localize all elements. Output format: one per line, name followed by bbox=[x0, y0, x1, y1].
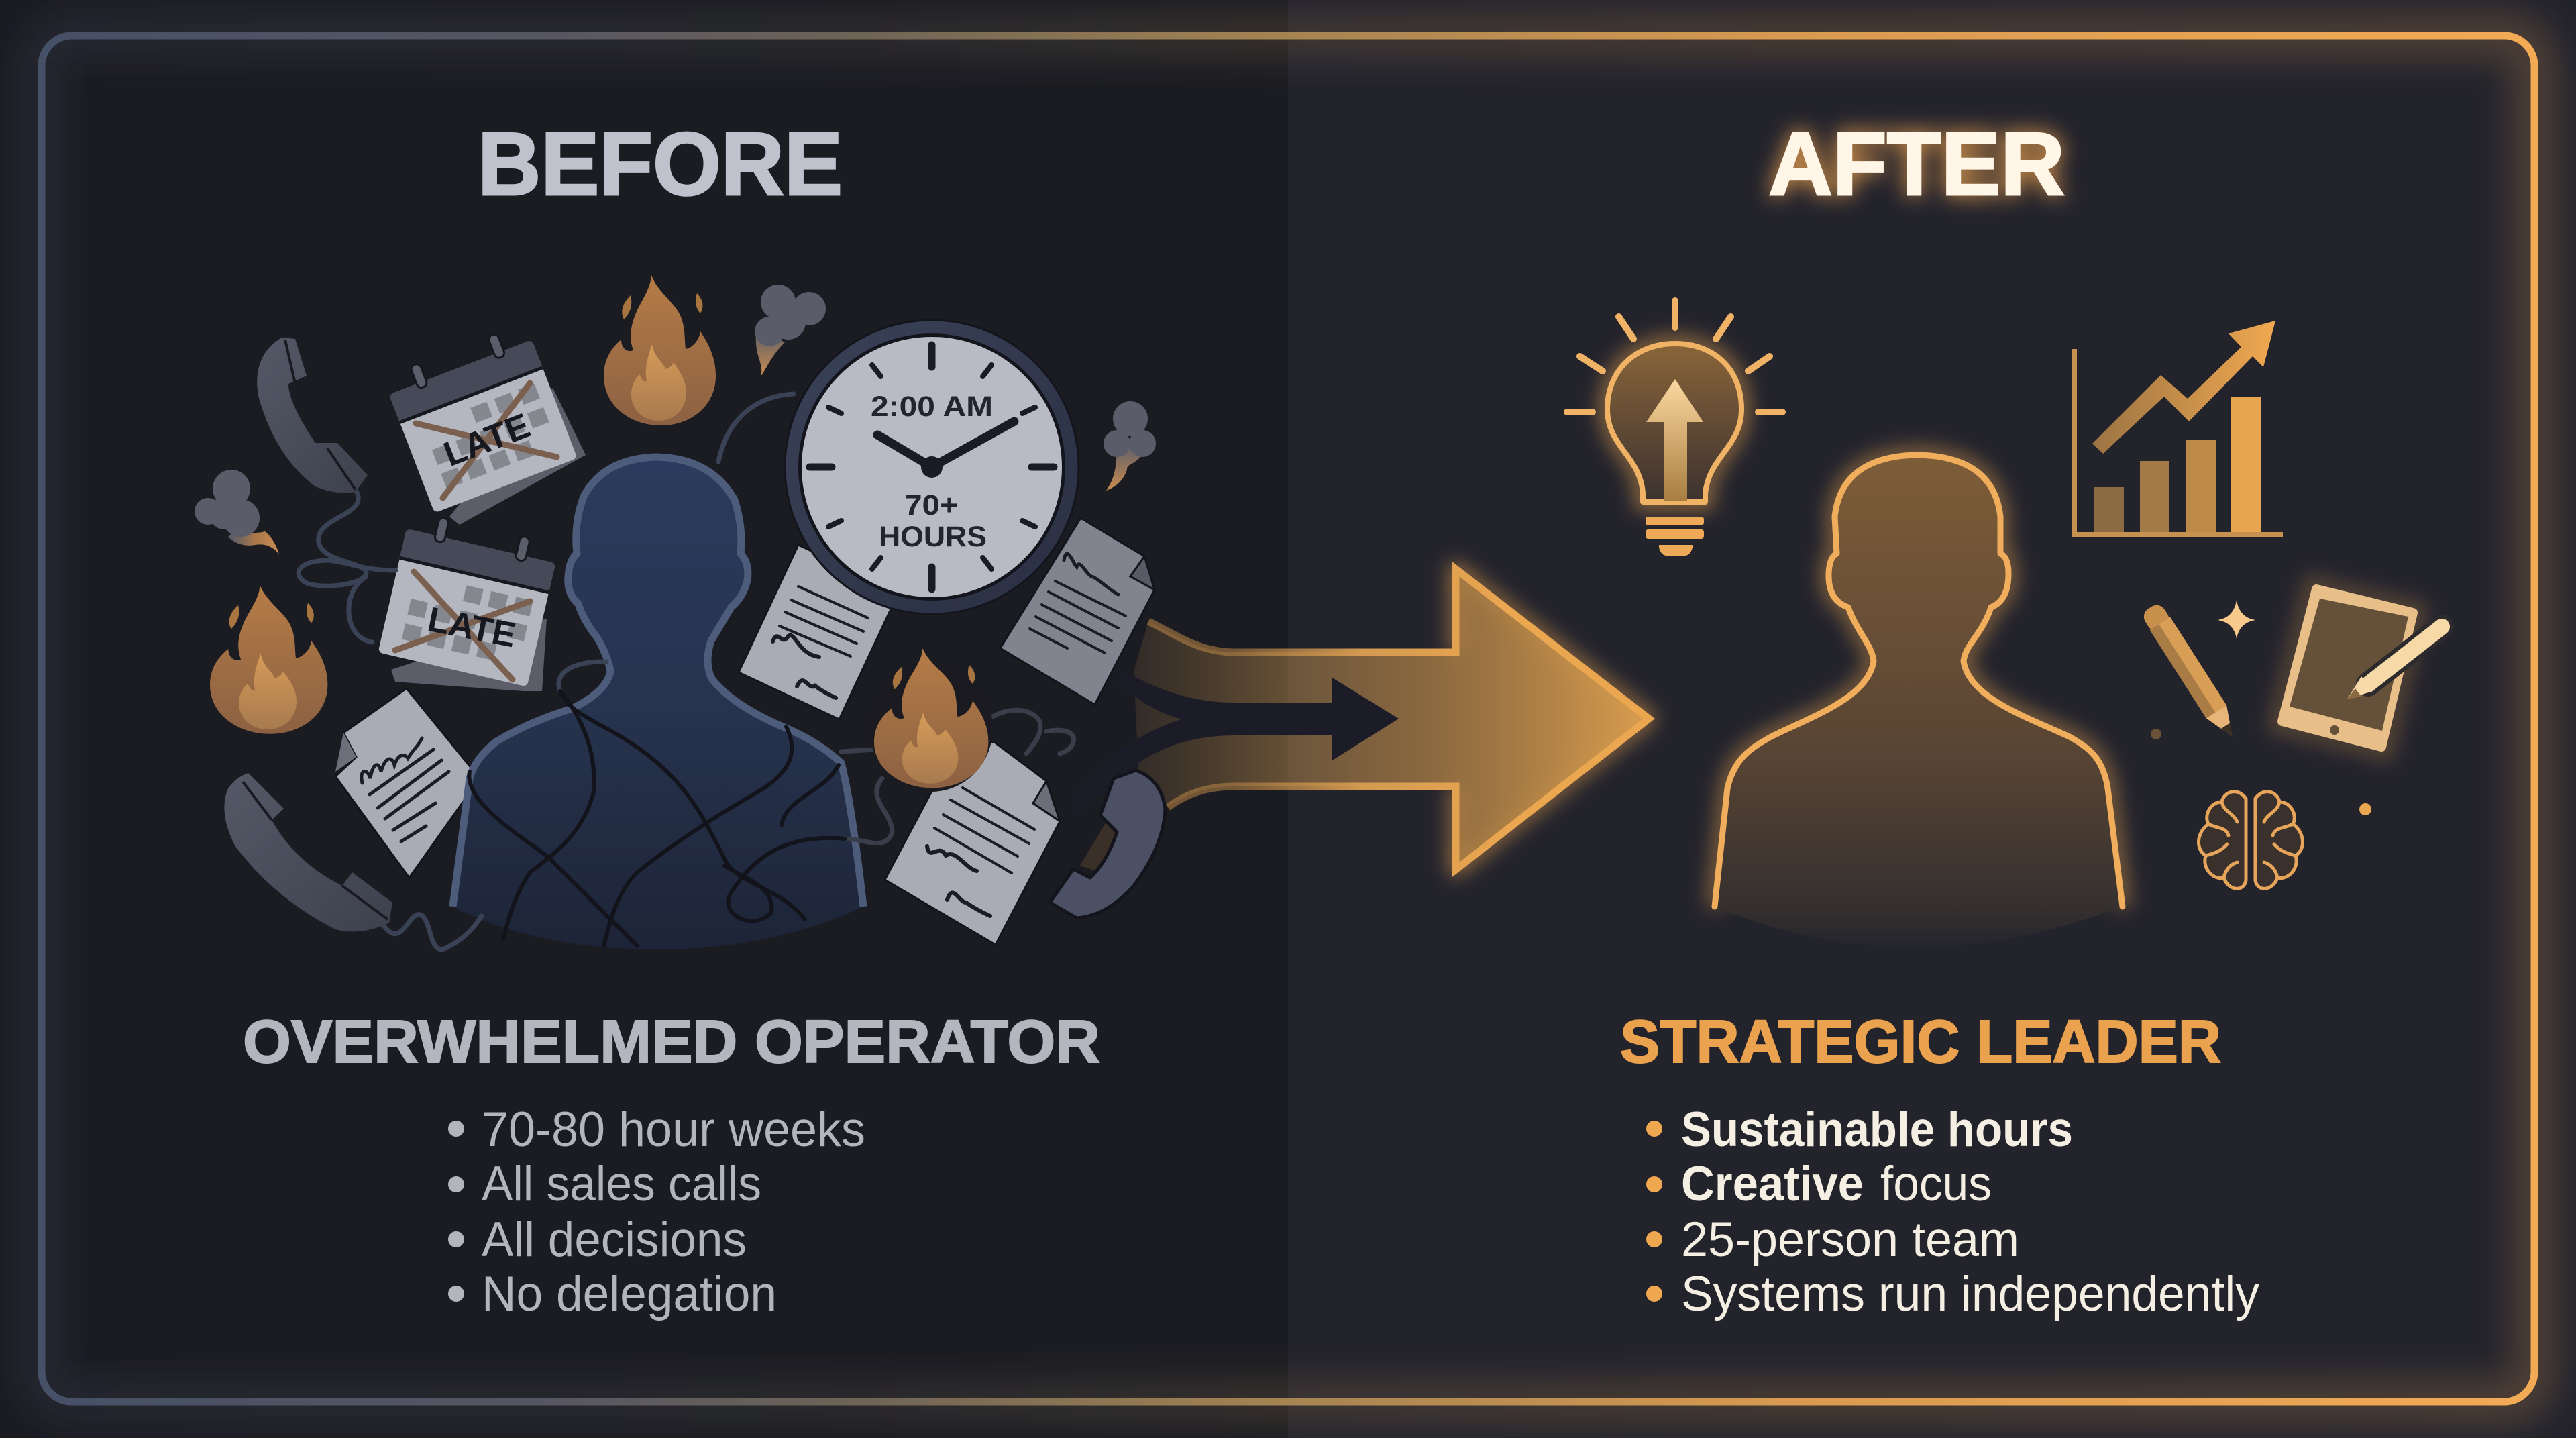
clock label: hours: HOURS bbox=[879, 521, 987, 553]
heading: BEFORE: BEFORE bbox=[478, 115, 843, 214]
faint lower branch behind phone bbox=[1080, 765, 1154, 872]
decorative dots bbox=[2151, 729, 2371, 815]
phone: right bbox=[1050, 770, 1165, 918]
icon: pencil bbox=[2140, 601, 2243, 743]
transition arrow: large glowing arrow bbox=[1073, 569, 1649, 872]
icon: brain bbox=[2198, 792, 2303, 888]
icon: tablet with stylus bbox=[2277, 584, 2442, 752]
flame: left bbox=[210, 585, 327, 734]
smoke: right bbox=[1104, 401, 1156, 491]
document: under clock bbox=[739, 545, 899, 719]
panel text: after bbox=[1620, 1009, 2259, 1321]
list: before bullets: All decisions bbox=[482, 1213, 747, 1267]
icon: growth bar chart bbox=[2074, 321, 2283, 535]
before illustration: overwhelmed operator bbox=[195, 275, 1165, 949]
list: before bullets: 70-80 hour weeks bbox=[482, 1102, 865, 1157]
list: after bullets: focus bbox=[1880, 1157, 1992, 1211]
smoke: top centre bbox=[755, 285, 826, 376]
operator silhouette bbox=[453, 457, 863, 949]
calendar: LATE lower bbox=[378, 511, 559, 691]
list: before bullets: All sales calls bbox=[482, 1157, 761, 1211]
icon: sparkle bbox=[2218, 600, 2255, 639]
clock label: hours: 70+ bbox=[904, 489, 959, 521]
document: lower right bbox=[885, 741, 1060, 945]
phone: top left bbox=[257, 338, 368, 493]
icon: light bulb with up arrow bbox=[1567, 301, 1782, 556]
document: lower left bbox=[335, 688, 480, 878]
list: after bullets bbox=[1646, 1102, 2259, 1321]
heading: AFTER: AFTER bbox=[1768, 115, 2065, 214]
after illustration: strategic leader bbox=[1567, 301, 2442, 947]
small dark arrow inside bbox=[1073, 671, 1399, 815]
clock label: hours bbox=[879, 489, 987, 553]
calendar: LATE upper bbox=[382, 322, 586, 525]
flame: right bbox=[869, 648, 993, 792]
clock label: time: 2:00 AM bbox=[871, 391, 993, 423]
list: before bullets: No delegation bbox=[482, 1267, 777, 1321]
list: after bullets: Sustainable hours bbox=[1681, 1102, 2073, 1157]
flame: top bbox=[604, 275, 716, 425]
list: after bullets: Systems run independently bbox=[1681, 1267, 2259, 1321]
subheading: overwhelmed operator: OVERWHELMED OPERATOR bbox=[243, 1009, 1100, 1076]
smoke: left bbox=[195, 470, 279, 554]
clock: 2:00 AM, 70+ hours bbox=[785, 320, 1079, 614]
calendar: LATE upper: LATE bbox=[439, 406, 535, 474]
list: before bullets bbox=[448, 1102, 865, 1321]
subheading: strategic leader: STRATEGIC LEADER bbox=[1620, 1009, 2221, 1076]
list: after bullets: Creative bbox=[1681, 1157, 1864, 1211]
list: after bullets: 25-person team bbox=[1681, 1213, 2019, 1267]
calendar: LATE lower: LATE bbox=[425, 600, 519, 655]
document: right of clock bbox=[1000, 518, 1155, 705]
panel text: before bbox=[243, 1009, 1100, 1321]
leader silhouette bbox=[1715, 455, 2123, 947]
phone: bottom left bbox=[224, 773, 392, 931]
tangled wires bbox=[299, 394, 1074, 949]
